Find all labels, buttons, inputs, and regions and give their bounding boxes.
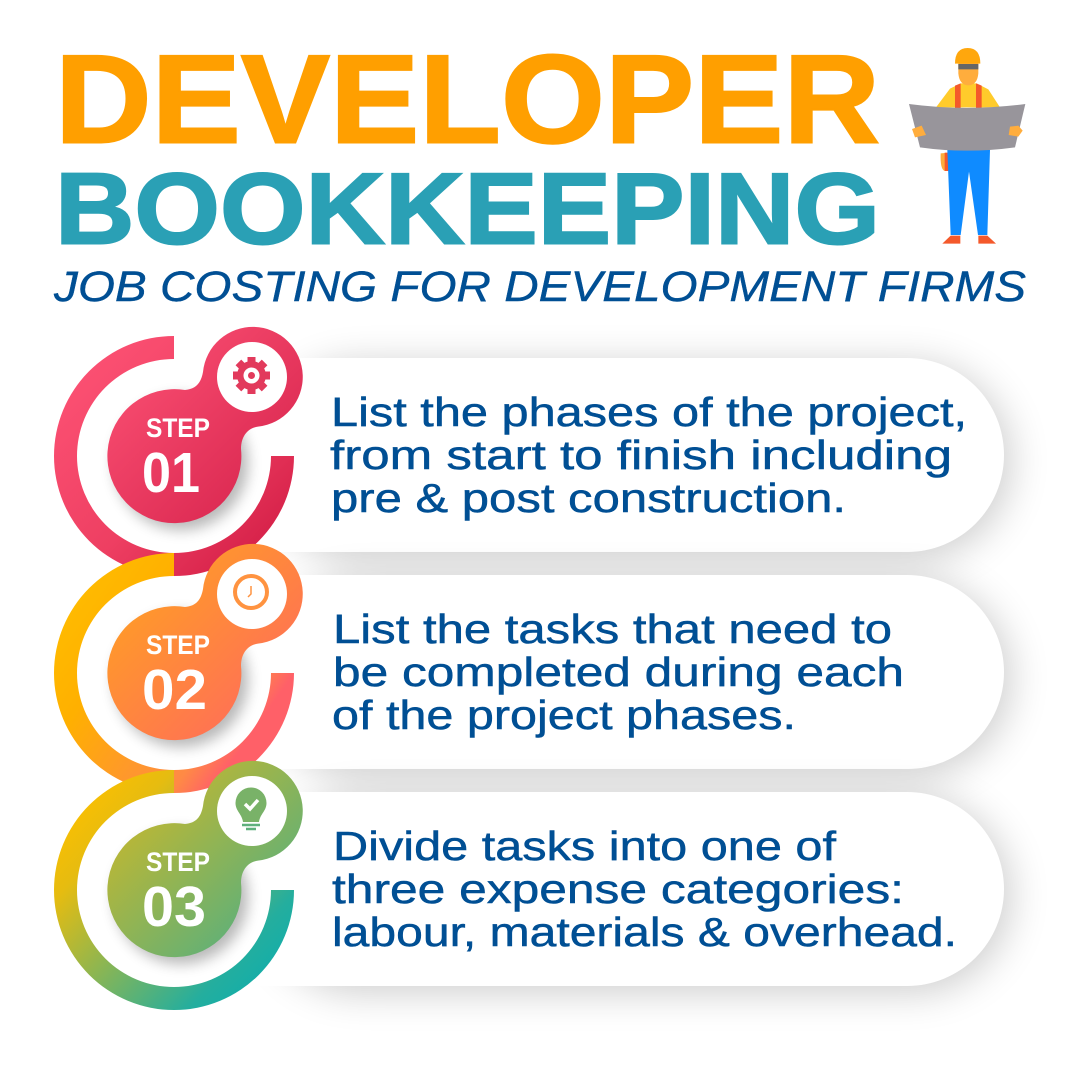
step 1 text: pre & post construction.: [331, 475, 846, 521]
pill shadow 1: [262, 364, 1010, 558]
badge 2: [107, 544, 303, 740]
subtitle: JOB COSTING FOR DEVELOPMENT FIRMS: [53, 263, 1026, 311]
step 2 text: of the project phases.: [332, 692, 796, 738]
step 1 text: [330, 389, 967, 521]
icon circle 3: [217, 776, 287, 846]
step 2 text: be completed during each: [333, 649, 904, 695]
step 1 number: 01: [142, 441, 200, 505]
icon circle 1: [217, 342, 287, 412]
pill shadow 3: [262, 798, 1010, 992]
badge shadow 3: [114, 830, 248, 964]
pill 3: [180, 792, 1004, 986]
icon: light bulb with check: [236, 788, 266, 829]
ring 2: [54, 553, 294, 793]
icon circle 2: [217, 559, 287, 629]
step 1 text: from start to finish including: [330, 432, 952, 478]
pill 2: [180, 575, 1004, 769]
step 1 label: STEP: [146, 413, 210, 443]
step 2 number: 02: [142, 658, 207, 722]
step 3 text: [332, 823, 957, 955]
step 3 text: labour, materials & overhead.: [332, 909, 957, 955]
ring 1: [54, 336, 294, 576]
icon: clock: [235, 576, 267, 608]
icon: construction worker holding plans: [909, 48, 1025, 244]
step 2: [54, 544, 904, 793]
step 3 label: STEP: [146, 847, 210, 877]
badge 3: [107, 761, 303, 957]
badge shadow 2: [114, 613, 248, 747]
pill 1: [180, 358, 1004, 552]
step 3 text: Divide tasks into one of: [333, 823, 837, 869]
step 1: [54, 327, 967, 576]
step 2 label: STEP: [146, 630, 210, 660]
step 3: [54, 761, 957, 1010]
step 2 text: [332, 606, 904, 738]
step 1 text: List the phases of the project,: [331, 389, 967, 435]
ring 3: [54, 770, 294, 1010]
badge 1: [107, 327, 303, 523]
badge shadow 1: [114, 396, 248, 530]
pill shadow 2: [262, 581, 1010, 775]
icon: gear: [233, 357, 270, 394]
title: bookkeeping: BOOKKEEPING: [55, 154, 880, 266]
step 3 number: 03: [142, 875, 206, 939]
step 3 text: three expense categories:: [332, 866, 904, 912]
step 2 text: List the tasks that need to: [333, 606, 892, 652]
title: developer: DEVELOPER: [55, 28, 880, 170]
